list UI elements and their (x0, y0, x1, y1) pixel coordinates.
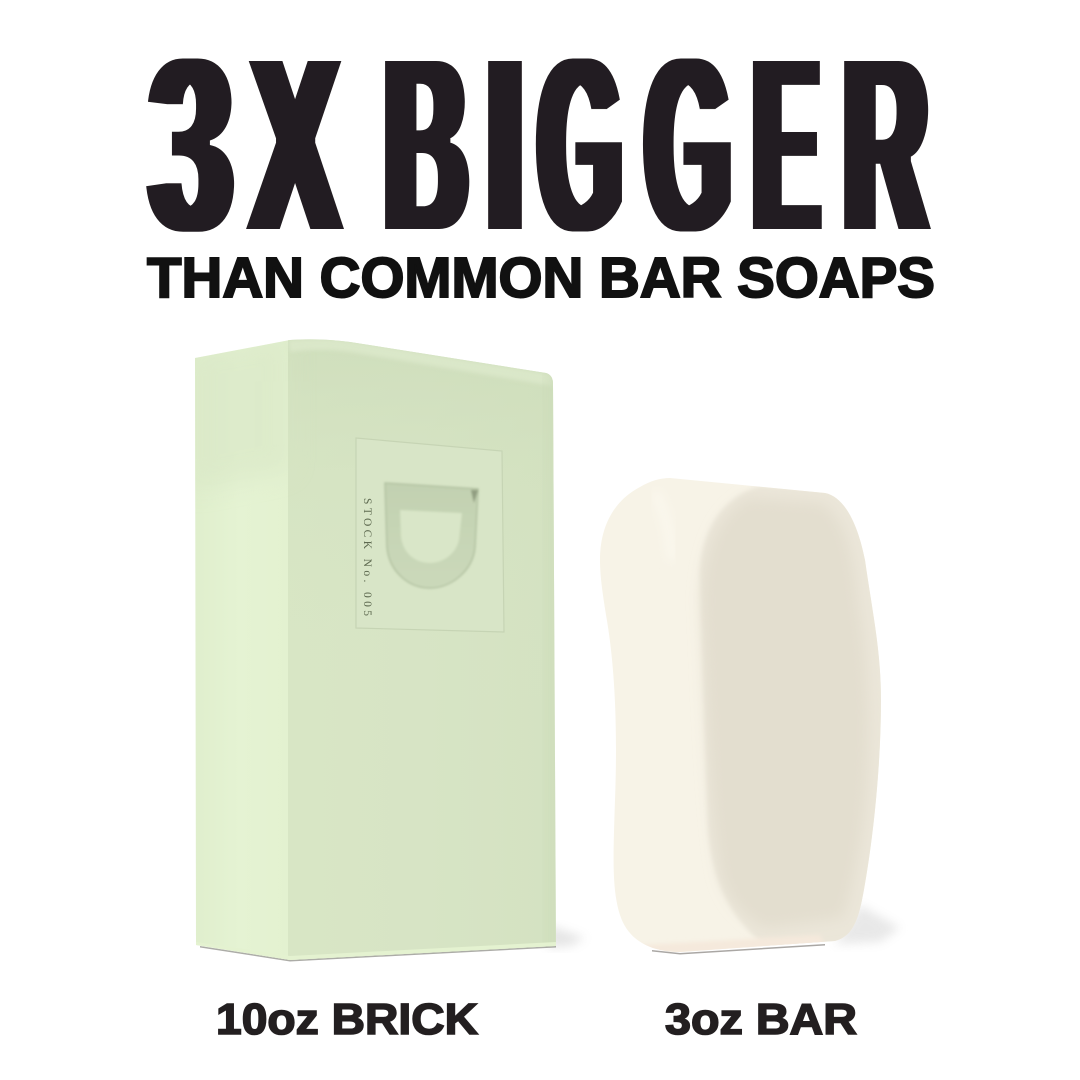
letter D cutout (385, 483, 478, 588)
bar inner face (708, 505, 862, 920)
title: 3X BIGGER: B (385, 5, 467, 284)
subtitle: THAN COMMON BAR SOAPS (147, 246, 935, 310)
brick front face (288, 330, 560, 970)
emboss panel (356, 438, 504, 632)
title: 3X BIGGER: G (539, 5, 621, 284)
brick top shading (294, 340, 516, 368)
bar contact shadow (652, 944, 825, 954)
bar highlight (655, 492, 672, 560)
stock number: STOCK No. 005 (361, 498, 373, 616)
brick bottom lip (197, 942, 556, 960)
title: 3X BIGGER: X (251, 5, 339, 284)
soap bar: 3oz cream (600, 478, 900, 955)
brick top edge highlight (290, 340, 549, 383)
soap brick: 10oz green (190, 330, 585, 970)
label: 3oz bar: 3oz BAR (665, 995, 857, 1044)
letter D inner (400, 510, 462, 563)
brick contact shadow (200, 946, 556, 962)
emboss square (356, 438, 504, 632)
text: R (844, 5, 927, 284)
title: 3X BIGGER: 3 (150, 5, 232, 284)
bar cast shadow (835, 905, 900, 944)
bar edge band (700, 486, 890, 950)
title: 3X BIGGER: G (646, 5, 730, 284)
bar bottom warm tone (648, 938, 821, 952)
brick right edge shade (545, 370, 560, 970)
D corner shadow (471, 490, 478, 503)
bar body (600, 478, 881, 952)
brick left face (190, 330, 290, 970)
title: 3X BIGGER: I (487, 5, 523, 284)
title: 3X BIGGER: E (754, 5, 818, 284)
brick left top shading (234, 360, 256, 460)
brick body (190, 330, 560, 970)
brick cast shadow (548, 925, 585, 948)
label: 10oz brick: 10oz BRICK (216, 995, 478, 1044)
